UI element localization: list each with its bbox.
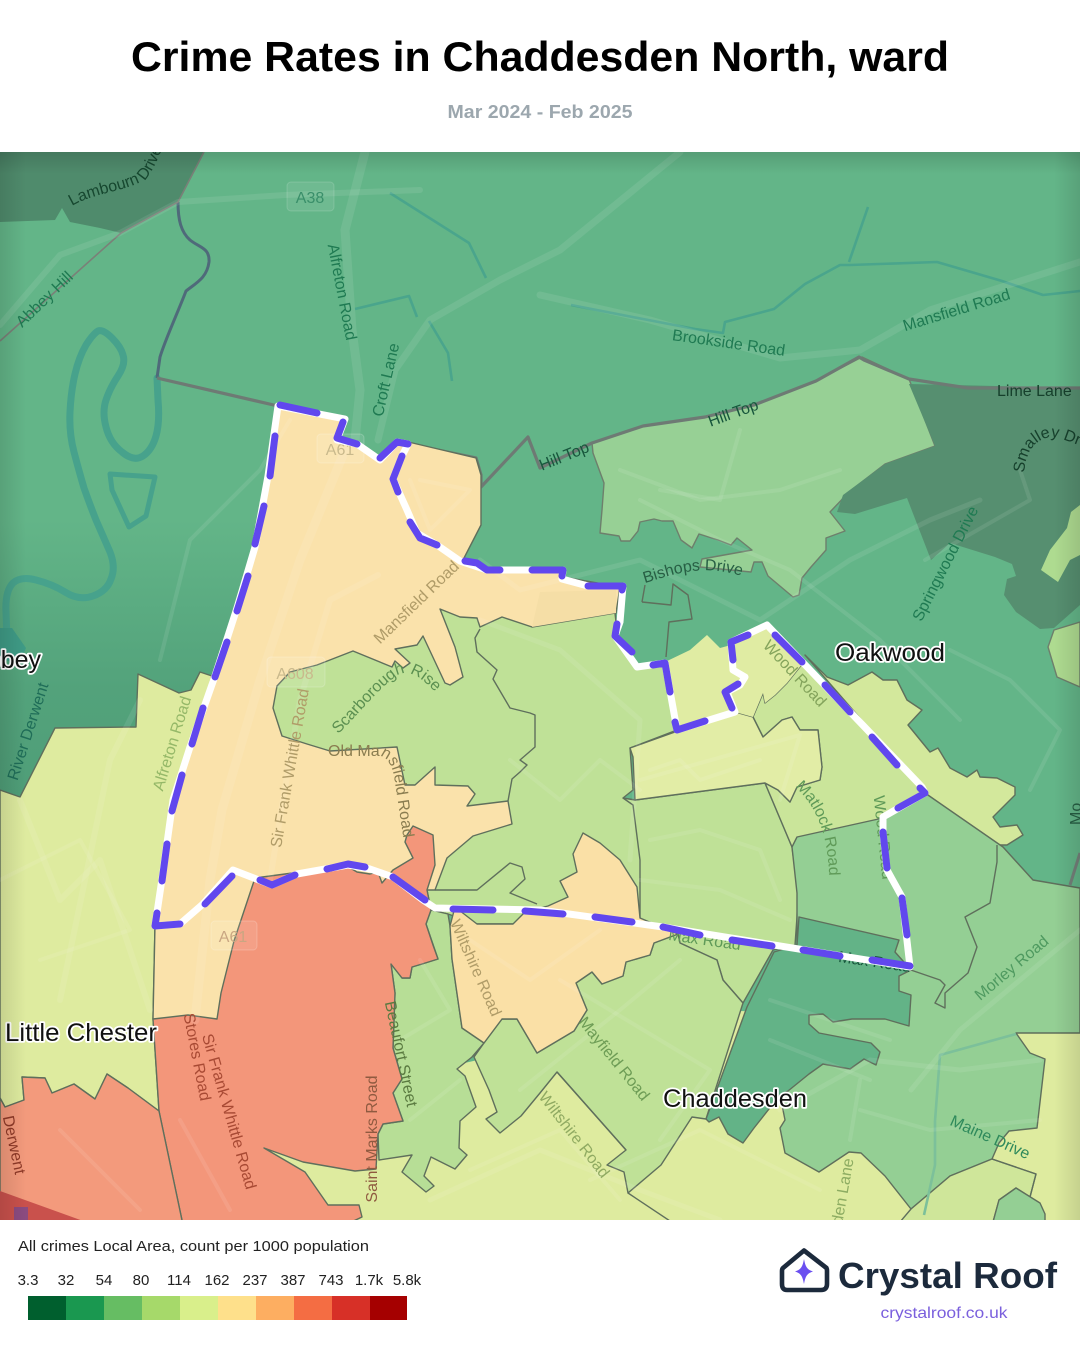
road labels: Sir Frank Whittle Road: [198, 1032, 259, 1191]
road labels: Stores Road: [180, 1012, 213, 1102]
patch: purple block: [14, 1207, 28, 1221]
stream: south-east: [924, 1034, 1016, 1215]
region: Wiltshire cream: [450, 833, 678, 1053]
legend tick values: 114: [167, 1272, 191, 1289]
region: Hill Top cream tail: [532, 608, 616, 627]
region: south-east lighter: [900, 1159, 1036, 1222]
region: Beaufort light green: [378, 910, 484, 1192]
road labels: Lime Lane: [997, 383, 1072, 400]
legend tick values: [18, 1272, 422, 1289]
region: south pale green: [271, 1011, 1080, 1220]
region: Lambourn dark green: [0, 152, 204, 233]
region: high crime red south-west: [0, 1074, 183, 1225]
road labels: Max Road: [667, 927, 742, 954]
road labels: Alfreton Road: [324, 242, 359, 342]
wordmark: Crystal Roof: [838, 1255, 1058, 1296]
legend title: All crimes Local Area, count per 1000 population: [18, 1238, 369, 1255]
legend tick values: 743: [318, 1272, 344, 1289]
road network: [0, 152, 1080, 1220]
shield: A608: [267, 657, 325, 687]
legend tick values: 5.8k: [393, 1272, 422, 1289]
region: Max Road darker green: [706, 917, 911, 1143]
legend colour bar: [28, 1296, 407, 1320]
legend tick values: 162: [204, 1272, 230, 1289]
region: ward north-east pale: [668, 629, 801, 726]
road labels: Mansfield Road: [371, 558, 463, 647]
region: Mayfield light green: [474, 934, 743, 1193]
region: Hill Top medium green: [592, 357, 935, 597]
road labels: Old Mansfield Road: [328, 744, 415, 838]
legend tick values: 80: [133, 1272, 149, 1289]
road labels: Chaddesden Lane: [818, 1157, 858, 1289]
road labels: Hill Top: [706, 397, 761, 431]
road labels: Max Road: [837, 949, 912, 976]
road labels: Wood Road: [759, 637, 829, 711]
place label: Chaddesden: Chaddesden: [663, 1085, 807, 1113]
place label: Little Chester: Little Chester: [5, 1019, 157, 1047]
region: south-east medium green: [780, 793, 1080, 1209]
website link text: crystalroof.co.uk: [880, 1305, 1009, 1322]
region: Wood Road green: [753, 663, 925, 847]
legend tick values: 54: [96, 1272, 112, 1289]
road labels: River Derwent: [5, 680, 53, 782]
road labels: Alfreton Road: [150, 694, 195, 793]
internal medium green boundaries: [905, 845, 997, 1008]
road labels: Matlock Road: [796, 780, 841, 875]
legend tick values: 237: [242, 1272, 268, 1289]
road labels: Sir Frank Whittle Road: [268, 687, 313, 849]
logo: Crystal Roof: [782, 1250, 1058, 1322]
legend: all crimes scale: [18, 1238, 422, 1320]
shield: A61 south: A61: [219, 929, 247, 946]
road labels: Wiltshire Road: [535, 1089, 612, 1181]
streams: [355, 193, 1080, 381]
shield: A38: [287, 182, 334, 211]
road labels: Croft Lane: [370, 342, 403, 418]
road labels: Abbey Hill: [13, 269, 77, 331]
legend tick values: 32: [58, 1272, 74, 1289]
road labels: Wood Road: [870, 795, 895, 880]
road labels: Maine Drive: [947, 1113, 1032, 1163]
region: cream ward area: [153, 406, 620, 1020]
region: very high crime corner: [0, 1191, 80, 1220]
subtitle: date range: Mar 2024 - Feb 2025: [448, 102, 632, 122]
road labels: Lambourn Drive: [68, 152, 161, 206]
icon: house with star: [782, 1250, 827, 1290]
region: eastern pale band: [805, 655, 1023, 845]
road labels: Mansfield Road: [901, 286, 1012, 335]
shield: A608: A608: [276, 666, 314, 683]
legend tick values: 3.3: [18, 1272, 38, 1289]
road labels: Beaufort Street: [381, 1000, 420, 1109]
internal light green boundaries: [435, 629, 640, 920]
shield: A61 south: [211, 921, 257, 950]
region: Wood Road pale: [630, 712, 822, 802]
place label: Oakwood: Oakwood: [835, 639, 945, 667]
map edge vignette: [0, 152, 1080, 1220]
shield: A61 north: [317, 434, 364, 463]
region: central light green: [273, 609, 798, 1003]
region: Lime Lane dark green: [837, 384, 1080, 629]
region: Little Chester pale green: [0, 672, 212, 1111]
ward boundary: Chaddesden North: [155, 405, 925, 967]
road labels: Mayfield Road: [575, 1014, 652, 1104]
region: high crime red north: [153, 826, 438, 1225]
shield: A38: A38: [296, 190, 324, 207]
Grey boundary lines: [0, 152, 1080, 885]
river Derwent: [0, 331, 159, 662]
region: west darker green: [0, 593, 236, 796]
region: light patches east edge: [1041, 505, 1080, 582]
legend tick values: 387: [280, 1272, 306, 1289]
road labels: Bishops Drive: [642, 559, 742, 583]
map base: low-crime green: [0, 152, 1080, 1063]
title: Crime Rates in Chaddesden North, ward: [131, 33, 949, 80]
internal boundary lines: [557, 584, 1036, 1231]
legend tick values: 1.7k: [355, 1272, 384, 1289]
road labels: Hill Top: [537, 439, 592, 474]
road labels: Scarborough Rise: [332, 663, 440, 732]
road labels: Morley Road: [972, 933, 1052, 1004]
road labels: Wiltshire Road: [446, 917, 504, 1019]
shield: A61 north: A61: [326, 442, 354, 459]
road labels: Saint Marks Road: [364, 1075, 381, 1203]
road labels: Springwood Drive: [910, 504, 982, 624]
region: south-east green patch: [993, 1188, 1045, 1222]
road labels: Brookside Road: [671, 327, 786, 360]
